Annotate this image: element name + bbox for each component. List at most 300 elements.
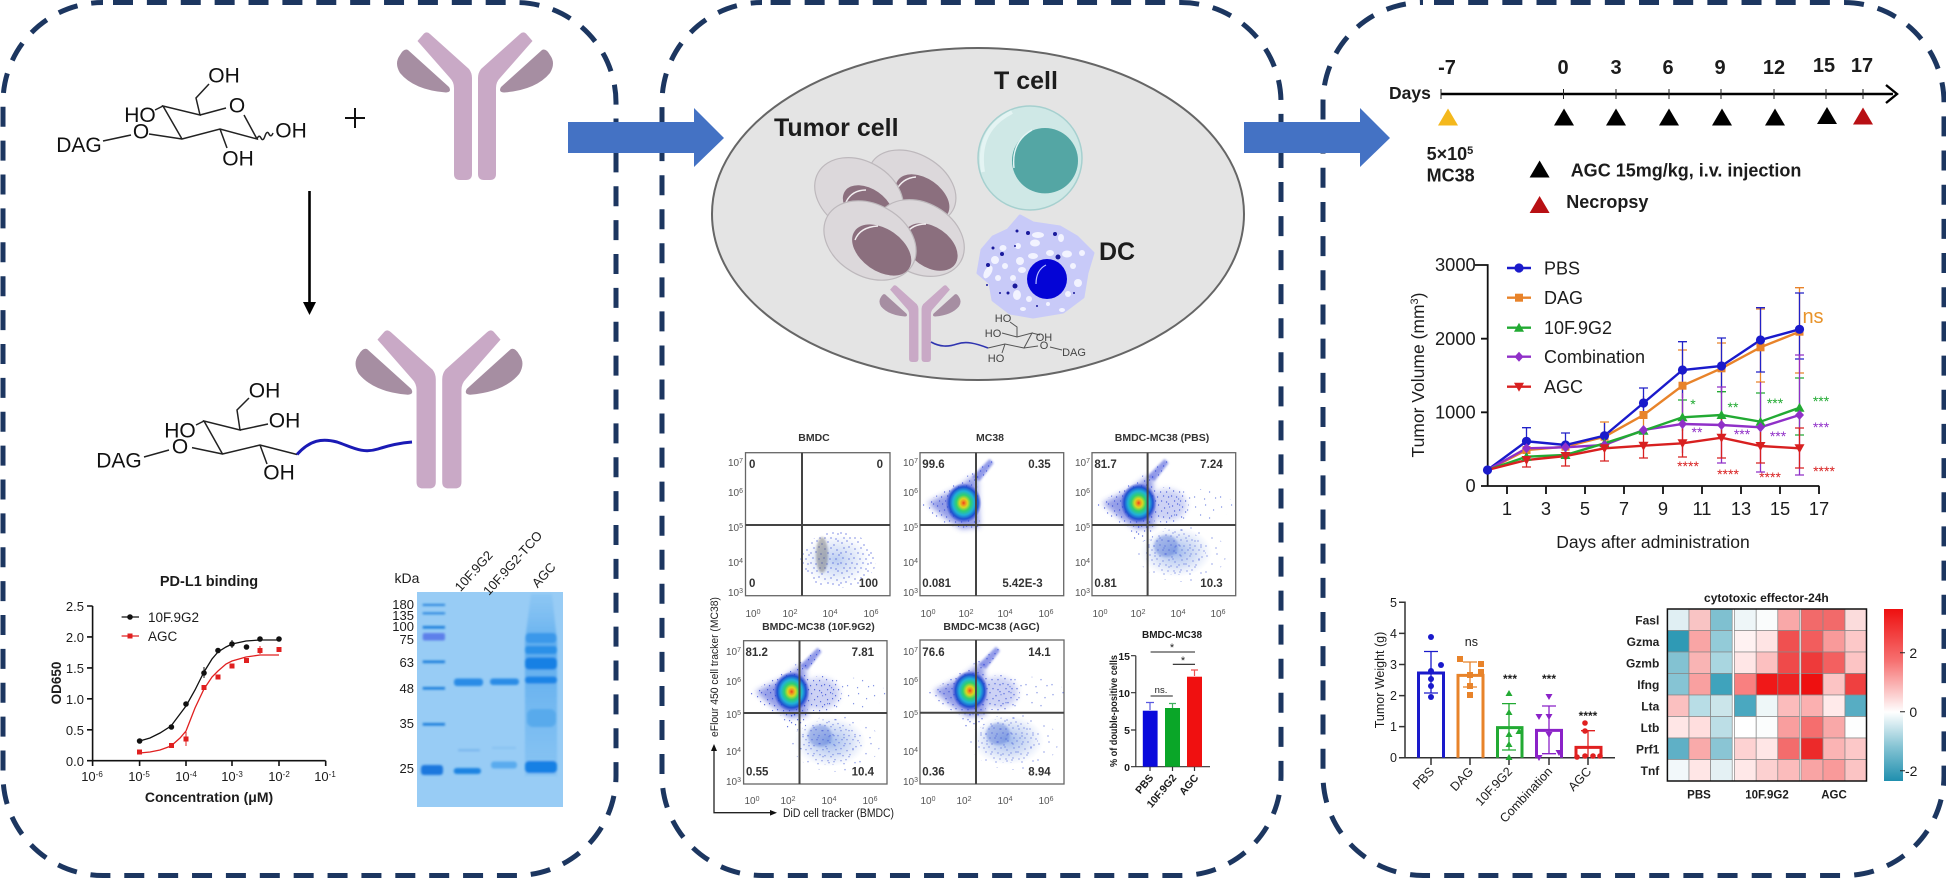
significance labels: *: [1690, 396, 1696, 412]
flow plot: BMDC-MC38 PBS: 0: [1104, 609, 1108, 616]
chart: PD-L1 binding: -4: [190, 770, 197, 779]
flow plot: BMDC-MC38 10F.9G2: 2: [792, 796, 796, 803]
heatmap: cytotoxic effector: Ifng: [1637, 678, 1659, 692]
flow plot: BMDC: 0: [877, 459, 883, 471]
icon: tumor cells: [801, 135, 978, 296]
SDS-PAGE gel: AGC: [529, 560, 559, 590]
flow plot: BMDC-MC38 AGC: 10: [903, 677, 914, 688]
flow plot: BMDC-MC38 PBS: 7.24: [1200, 459, 1223, 471]
bar chart: tumor weight: 0: [1390, 751, 1397, 765]
legend: Combination: [1544, 347, 1645, 367]
line chart: tumor volume: 9: [1658, 498, 1668, 519]
line chart: tumor volume: 11: [1693, 498, 1711, 519]
bar chart: double-positive cells: *: [1181, 655, 1186, 667]
flow plot: BMDC-MC38 AGC: 4: [914, 747, 918, 754]
flow plot: BMDC: 5: [739, 523, 743, 530]
SDS-PAGE gel: 63: [400, 655, 414, 670]
flow plot: MC38: 5.42E-3: [1002, 578, 1043, 590]
flow plot: BMDC-MC38 10F.9G2: 10: [744, 796, 756, 807]
heatmap: cytotoxic effector: Ltb: [1641, 721, 1659, 735]
SDS-PAGE gel: 75: [400, 632, 414, 647]
icon: dendritic cell: [978, 216, 1093, 317]
line chart: tumor volume: 2000: [1435, 328, 1476, 349]
flow plot: BMDC-MC38 PBS: 3: [1086, 588, 1090, 595]
flow plot: BMDC-MC38 PBS: 6: [1222, 609, 1226, 616]
flow plot: BMDC-MC38 AGC: 10: [903, 777, 914, 788]
bar chart: tumor weight: PBS: [1410, 764, 1437, 792]
bar chart: tumor weight: ns: [1465, 635, 1478, 649]
flow plot: BMDC-MC38 AGC: BMDC-MC38 (AGC): [943, 621, 1040, 633]
reaction arrow: [303, 191, 316, 315]
flow plot: BMDC: 10: [728, 488, 739, 499]
legend: 10F.9G2: [148, 610, 199, 625]
legend: [122, 610, 199, 644]
heatmap: cytotoxic effector: cytotoxic effector-24h: [1704, 591, 1829, 605]
flow plot: BMDC-MC38 AGC: 10: [956, 796, 968, 807]
chart: PD-L1 binding: 2.0: [66, 630, 84, 645]
flow plot: BMDC-MC38 AGC: 5: [914, 710, 918, 717]
line chart: tumor volume: 0: [1466, 475, 1476, 496]
flow plot: MC38: 10: [903, 488, 914, 499]
line chart: tumor volume: 7: [1619, 498, 1629, 519]
flow plot: BMDC-MC38 10F.9G2: 0.55: [746, 767, 769, 779]
heatmap: cytotoxic effector: Tnf: [1641, 764, 1660, 778]
chemical structure: DAG glucose: OH: [208, 64, 240, 88]
line chart: tumor volume: 5: [1580, 498, 1590, 519]
chemical structure: conjugate sugar: HO: [164, 420, 196, 442]
bar chart: double-positive cells: 5: [1124, 725, 1130, 737]
flow plot: BMDC: 3: [739, 588, 743, 595]
treatment timeline: Necropsy: [1566, 192, 1648, 212]
flow plot: BMDC-MC38 10F.9G2: 4: [737, 747, 741, 754]
significance labels: ****: [1717, 466, 1739, 482]
panel: synthesis and characterization: [3, 2, 616, 876]
flow plot: BMDC-MC38 PBS: BMDC-MC38 (PBS): [1115, 432, 1209, 444]
significance labels: [1677, 306, 1835, 485]
flow plot: BMDC-MC38 AGC: 10: [903, 710, 914, 721]
flow plot: BMDC-MC38 PBS: 2: [1142, 609, 1146, 616]
small linker and sugar: O: [1040, 340, 1049, 352]
treatment timeline: MC38: [1427, 166, 1475, 186]
chart: PD-L1 binding: 1.0: [66, 692, 84, 707]
line chart: tumor volume: [1408, 254, 1835, 552]
chemical structure: DAG glucose: O: [133, 120, 149, 144]
blue linker: [297, 440, 412, 454]
SDS-PAGE gel: 100: [392, 619, 414, 634]
label: T cell: T cell: [994, 67, 1058, 95]
SDS-PAGE gel: 135: [392, 608, 414, 623]
SDS-PAGE gel: 48: [400, 681, 414, 696]
SDS-PAGE gel: 10F.9G2-TCO: [480, 528, 545, 598]
bar chart: double-positive cells: 10: [1118, 688, 1130, 700]
small linker and sugar: DAG: [1062, 347, 1086, 359]
flow plot: BMDC-MC38 10F.9G2: 0: [756, 796, 760, 803]
bar chart: tumor weight: 1: [1390, 720, 1397, 734]
heatmap: cytotoxic effector: AGC: [1821, 790, 1847, 802]
flow plot: BMDC-MC38 PBS: 5: [1086, 523, 1090, 530]
flow plot: BMDC: 6: [739, 488, 743, 495]
icon: conjugated antibody: [356, 330, 522, 488]
flow plot: BMDC: 10: [728, 458, 739, 469]
panel: tumor microenvironment and flow cytometry: [662, 2, 1281, 876]
flow plot: BMDC-MC38 PBS: 6: [1086, 488, 1090, 495]
flow plot: BMDC-MC38 10F.9G2: 3: [737, 777, 741, 784]
chart: PD-L1 binding: -1: [329, 770, 336, 779]
heatmap: cytotoxic effector: Lta: [1641, 700, 1660, 714]
small linker and sugar: HO: [985, 328, 1002, 340]
flow plot: MC38: 3: [914, 588, 918, 595]
chart: PD-L1 binding: OD650: [49, 662, 64, 704]
treatment timeline: 5×10: [1427, 144, 1467, 164]
flow plot: BMDC: BMDC: [798, 432, 830, 444]
flow plot: BMDC-MC38 PBS: 4: [1086, 558, 1090, 565]
line chart: tumor volume: Tumor Volume (mm: [1408, 304, 1428, 457]
flow plot: BMDC-MC38 PBS: [1075, 432, 1236, 620]
flow plot: BMDC: 10: [822, 609, 834, 620]
bar chart: tumor weight: 4: [1390, 627, 1397, 641]
SDS-PAGE gel: kDa: [395, 570, 420, 586]
flow plot: MC38: 10: [903, 458, 914, 469]
line chart: tumor volume: 17: [1809, 498, 1829, 519]
bar chart: tumor weight: 3: [1390, 658, 1397, 672]
plus sign: [345, 108, 365, 128]
flow plot: MC38: 10: [903, 588, 914, 599]
heatmap: cytotoxic effector: [1626, 591, 1918, 802]
flow plot: BMDC-MC38 PBS: 4: [1182, 609, 1186, 616]
flow plot: BMDC-MC38 AGC: 14.1: [1028, 647, 1051, 659]
legend: AGC: [1544, 377, 1583, 397]
flow plot: BMDC: 2: [794, 609, 798, 616]
treatment timeline: Days: [1389, 83, 1431, 103]
legend: AGC: [148, 629, 178, 644]
flow plot: MC38: [903, 432, 1064, 620]
flow plot: MC38: 7: [914, 458, 918, 465]
chemical structure: DAG glucose: [56, 64, 307, 170]
flow plot: MC38: 4: [914, 558, 918, 565]
flow plot: BMDC: 6: [875, 609, 879, 616]
line chart: tumor volume: 3: [1409, 298, 1421, 304]
flow plot: BMDC: 0: [749, 459, 755, 471]
treatment timeline: 5: [1467, 145, 1473, 157]
line chart: tumor volume: 15: [1770, 498, 1790, 519]
bar chart: tumor weight: ****: [1579, 709, 1598, 723]
flow plot: BMDC-MC38 10F.9G2: [726, 621, 887, 807]
bar chart: double-positive cells: BMDC-MC38: [1142, 630, 1202, 641]
flow axis titles and arrows: [709, 597, 894, 820]
flow plot: MC38: 0: [932, 609, 936, 616]
panel: in vivo efficacy: [1323, 2, 1944, 876]
treatment timeline: 12: [1763, 57, 1785, 79]
bar chart: double-positive cells: *: [1170, 642, 1175, 654]
flow plot: BMDC-MC38 AGC: 10: [1038, 796, 1050, 807]
illustration: cell ellipse: [712, 48, 1244, 380]
significance labels: **: [1692, 424, 1703, 440]
flow plot: BMDC-MC38 AGC: 76.6: [922, 647, 945, 659]
flow plot: BMDC-MC38 10F.9G2: 10: [726, 647, 737, 658]
flow plot: BMDC-MC38 PBS: 81.7: [1094, 459, 1117, 471]
flow plot: BMDC-MC38 10F.9G2: 81.2: [746, 647, 768, 659]
flow plot: BMDC-MC38 10F.9G2: 10: [780, 796, 792, 807]
flow plot: BMDC-MC38 PBS: 10: [1075, 458, 1086, 469]
flow plot: BMDC-MC38 10F.9G2: 6: [874, 796, 878, 803]
chemical structure: conjugate sugar: OH: [263, 462, 295, 484]
flow axis titles and arrows: DiD cell tracker (BMDC): [783, 808, 894, 820]
bar chart: tumor weight: Tumor Weight (g): [1373, 632, 1387, 728]
treatment timeline: -7: [1438, 57, 1456, 79]
bar chart: double-positive cells: % of double-positive cells: [1108, 655, 1120, 767]
line chart: tumor volume: ): [1408, 293, 1428, 298]
flow plot: MC38: MC38: [976, 432, 1004, 444]
heatmap: cytotoxic effector: Gzmb: [1626, 656, 1659, 670]
chemical structure: conjugate sugar: [96, 380, 300, 484]
SDS-PAGE gel: 25: [400, 761, 414, 776]
bar chart: double-positive cells: [1108, 630, 1210, 810]
flow plot: MC38: 2: [970, 609, 974, 616]
heatmap: cytotoxic effector: Prf1: [1636, 742, 1660, 756]
significance labels: ***: [1813, 419, 1830, 435]
flow plot: BMDC-MC38 10F.9G2: 10: [821, 796, 833, 807]
chemical structure: conjugate sugar: O: [172, 436, 188, 458]
significance labels: ****: [1677, 458, 1699, 474]
flow plot: MC38: 6: [1050, 609, 1054, 616]
treatment timeline: [1389, 55, 1897, 213]
flow plot: BMDC: 10: [728, 558, 739, 569]
chemical structure: DAG glucose: O: [229, 94, 245, 118]
arrow: panel 1 to panel 2: [568, 108, 724, 167]
significance labels: ***: [1767, 395, 1784, 411]
flow plot: BMDC-MC38 AGC: 4: [1009, 796, 1013, 803]
flow plot: MC38: 10: [903, 558, 914, 569]
SDS-PAGE gel: 10F.9G2: [452, 548, 496, 594]
flow plot: BMDC-MC38 PBS: 10: [1092, 609, 1104, 620]
error bars: [1522, 288, 1804, 475]
treatment timeline: 17: [1851, 55, 1873, 77]
SDS-PAGE gel: [392, 528, 563, 807]
significance labels: ns: [1802, 306, 1824, 328]
flow plot: BMDC: 7: [739, 458, 743, 465]
chart: PD-L1 binding: 0.0: [66, 754, 84, 769]
flow plot: BMDC-MC38 10F.9G2: 4: [833, 796, 837, 803]
flow plot: BMDC: 4: [739, 558, 743, 565]
bar chart: tumor weight: DAG: [1447, 764, 1476, 794]
flow plot: BMDC-MC38 AGC: 10: [903, 747, 914, 758]
bar chart: double-positive cells: ns.: [1155, 685, 1167, 696]
flow plot: BMDC-MC38 10F.9G2: 10: [862, 796, 874, 807]
flow plot: BMDC: 10: [745, 609, 757, 620]
flow plot: BMDC-MC38 10F.9G2: 10: [726, 777, 737, 788]
treatment timeline: 0: [1557, 57, 1569, 79]
flow plot: BMDC-MC38 10F.9G2: 10: [726, 677, 737, 688]
flow plot: BMDC: 0: [749, 578, 755, 590]
bar chart: tumor weight: [1373, 596, 1615, 825]
small linker and sugar: [931, 313, 1086, 365]
treatment timeline: 15: [1813, 55, 1835, 77]
bar chart: tumor weight: 2: [1390, 689, 1397, 703]
chart: PD-L1 binding: -5: [143, 770, 150, 779]
flow plot: BMDC: 0: [757, 609, 761, 616]
small linker and sugar: OH: [1036, 332, 1052, 344]
chemical structure: conjugate sugar: DAG: [96, 450, 142, 472]
flow plot: BMDC-MC38 PBS: 10: [1075, 588, 1086, 599]
chart: PD-L1 binding: -3: [236, 770, 243, 779]
chart: PD-L1 binding: Concentration (μM): [145, 789, 273, 805]
arrow: panel 2 to panel 3: [1244, 108, 1390, 167]
flow plot: BMDC-MC38 AGC: 7: [914, 647, 918, 654]
significance labels: ****: [1813, 463, 1835, 479]
icon: T cell: [978, 106, 1082, 210]
flow plot: BMDC-MC38 10F.9G2: 10: [726, 710, 737, 721]
chemical structure: DAG glucose: OH: [275, 120, 307, 142]
chart: PD-L1 binding: 10: [128, 769, 143, 784]
flow plot: BMDC: 10: [782, 609, 794, 620]
flow plot: BMDC-MC38 AGC: 6: [914, 677, 918, 684]
bar chart: tumor weight: ***: [1503, 672, 1517, 686]
legend: DAG: [1544, 288, 1583, 308]
flow axis titles and arrows: eFlour 450 cell tracker (MC38): [709, 597, 721, 737]
bar chart: double-positive cells: 0: [1124, 762, 1130, 774]
flow plot: MC38: 10: [920, 609, 932, 620]
flow plot: BMDC-MC38 10F.9G2: 10: [726, 747, 737, 758]
flow plot: MC38: 5: [914, 523, 918, 530]
bar chart: tumor weight: Combination: [1497, 764, 1555, 825]
chart: PD-L1 binding: [49, 574, 336, 805]
chemical structure: conjugate sugar: OH: [269, 410, 300, 432]
flow plot: BMDC-MC38 AGC: 2: [968, 796, 972, 803]
flow plot: BMDC-MC38 PBS: 7: [1086, 458, 1090, 465]
flow plot: BMDC-MC38 10F.9G2: BMDC-MC38 (10F.9G2): [762, 621, 875, 633]
flow plot: BMDC-MC38 AGC: 10: [903, 647, 914, 658]
flow plot: MC38: 4: [1009, 609, 1013, 616]
flow plot: MC38: 99.6: [922, 459, 945, 471]
flow plot: BMDC: 10: [863, 609, 875, 620]
chart: PD-L1 binding: 10: [314, 769, 329, 784]
colorbar: 2: [1909, 645, 1917, 661]
significance labels: ***: [1770, 428, 1787, 444]
bar chart: double-positive cells: AGC: [1177, 772, 1202, 798]
line chart: tumor volume: 3000: [1435, 254, 1476, 275]
chart: PD-L1 binding: 10: [221, 769, 236, 784]
chart: PD-L1 binding: -2: [283, 770, 290, 779]
chart: PD-L1 binding: 10: [175, 769, 190, 784]
flow plot: BMDC: 10: [728, 523, 739, 534]
line chart: tumor volume: 1000: [1435, 402, 1476, 422]
bar chart: tumor weight: 5: [1390, 596, 1397, 610]
flow plot: BMDC-MC38 PBS: 10: [1075, 558, 1086, 569]
legend: 10F.9G2: [1544, 318, 1612, 338]
flow plot: BMDC-MC38 AGC: 10: [997, 796, 1009, 807]
flow plot: BMDC: 10: [728, 588, 739, 599]
bar chart: double-positive cells: PBS: [1133, 772, 1156, 796]
chart: PD-L1 binding: 2.5: [66, 599, 84, 614]
flow plot: MC38: 10: [1038, 609, 1050, 620]
flow plot: BMDC-MC38 AGC: 10: [920, 796, 932, 807]
bar chart: tumor weight: 10F.9G2: [1473, 764, 1515, 809]
chemical structure: DAG glucose: DAG: [56, 134, 102, 157]
significance labels: **: [1728, 399, 1739, 415]
heatmap: cytotoxic effector: Fasl: [1635, 614, 1659, 628]
flow plot: BMDC-MC38 PBS: 0.81: [1094, 578, 1117, 590]
flow plot: BMDC-MC38 AGC: 0.36: [922, 767, 945, 779]
icon: antibody: [397, 32, 553, 180]
legend: PBS: [1544, 258, 1580, 278]
flow plot: BMDC-MC38 AGC: 6: [1050, 796, 1054, 803]
flow plot: MC38: 0.35: [1028, 459, 1051, 471]
bar chart: tumor weight: AGC: [1565, 764, 1594, 794]
chemical structure: conjugate sugar: OH: [249, 380, 280, 402]
flow plot: BMDC-MC38 PBS: 10: [1210, 609, 1222, 620]
flow plot: BMDC: 4: [834, 609, 838, 616]
flow plot: BMDC-MC38 PBS: 10: [1075, 523, 1086, 534]
flow plot: BMDC-MC38 10F.9G2: 7.81: [852, 647, 875, 659]
flow plot: BMDC-MC38 10F.9G2: 10.4: [852, 767, 875, 779]
flow plot: BMDC-MC38 AGC: 0: [932, 796, 936, 803]
SDS-PAGE gel: 180: [392, 597, 414, 612]
significance labels: ***: [1734, 426, 1751, 442]
chart: PD-L1 binding: 1.5: [66, 661, 84, 676]
colorbar: [1884, 609, 1918, 781]
colorbar: -2: [1905, 763, 1918, 779]
flow plot: BMDC-MC38 10F.9G2: 5: [737, 710, 741, 717]
flow plot: BMDC-MC38 PBS: 10: [1075, 488, 1086, 499]
chart: PD-L1 binding: 10: [81, 769, 96, 784]
flow plot: BMDC-MC38 AGC: 3: [914, 777, 918, 784]
series lines: [1488, 329, 1800, 470]
flow plot: BMDC-MC38 10F.9G2: 6: [737, 677, 741, 684]
flow plot: BMDC-MC38 10F.9G2: 7: [737, 647, 741, 654]
flow plot: MC38: 10: [903, 523, 914, 534]
chart: PD-L1 binding: -6: [96, 770, 103, 779]
bar chart: double-positive cells: 15: [1118, 651, 1130, 663]
legend: [1507, 258, 1645, 397]
chart title: PD-L1 binding: [160, 574, 258, 590]
small linker and sugar: HO: [995, 313, 1012, 325]
flow plot: BMDC: [728, 432, 890, 620]
chemical structure: DAG glucose: HO: [124, 104, 156, 127]
bar chart: tumor weight: ***: [1542, 672, 1556, 686]
flow plot: BMDC-MC38 AGC: 8.94: [1028, 767, 1051, 779]
SDS-PAGE gel: 35: [400, 716, 414, 731]
chart: PD-L1 binding: 10: [268, 769, 283, 784]
flow plot: MC38: 6: [914, 488, 918, 495]
heatmap: cytotoxic effector: Gzma: [1627, 635, 1660, 649]
icon: small antibody: [879, 285, 961, 362]
line chart: tumor volume: Days after administration: [1556, 532, 1750, 552]
bar chart: double-positive cells: 10F.9G2: [1145, 772, 1179, 810]
flow plot: MC38: 0.081: [922, 578, 952, 590]
line chart: tumor volume: 3: [1541, 498, 1551, 519]
treatment timeline: 6: [1662, 57, 1674, 79]
flow plot: BMDC-MC38 PBS: 10: [1170, 609, 1182, 620]
significance labels: ****: [1759, 469, 1781, 485]
flow plot: MC38: 10: [997, 609, 1009, 620]
series markers: [1483, 325, 1804, 475]
line chart: tumor volume: 1: [1502, 498, 1512, 519]
treatment timeline: 3: [1610, 57, 1622, 79]
flow plot: BMDC: 100: [859, 578, 878, 590]
line chart: tumor volume: 13: [1731, 498, 1751, 519]
label: DC: DC: [1099, 238, 1135, 266]
flow plot: BMDC-MC38 PBS: 10: [1130, 609, 1142, 620]
significance labels: ***: [1813, 393, 1830, 409]
flow plot: BMDC-MC38 AGC: [903, 621, 1064, 807]
chart: PD-L1 binding: 0.5: [66, 723, 84, 738]
small linker and sugar: HO: [988, 353, 1005, 365]
chemical structure: DAG glucose: OH: [222, 148, 254, 170]
treatment timeline: AGC 15mg/kg, i.v. injection: [1571, 161, 1801, 181]
treatment timeline: 9: [1714, 57, 1726, 79]
flow plot: MC38: 10: [958, 609, 970, 620]
label: Tumor cell: Tumor cell: [774, 114, 899, 142]
